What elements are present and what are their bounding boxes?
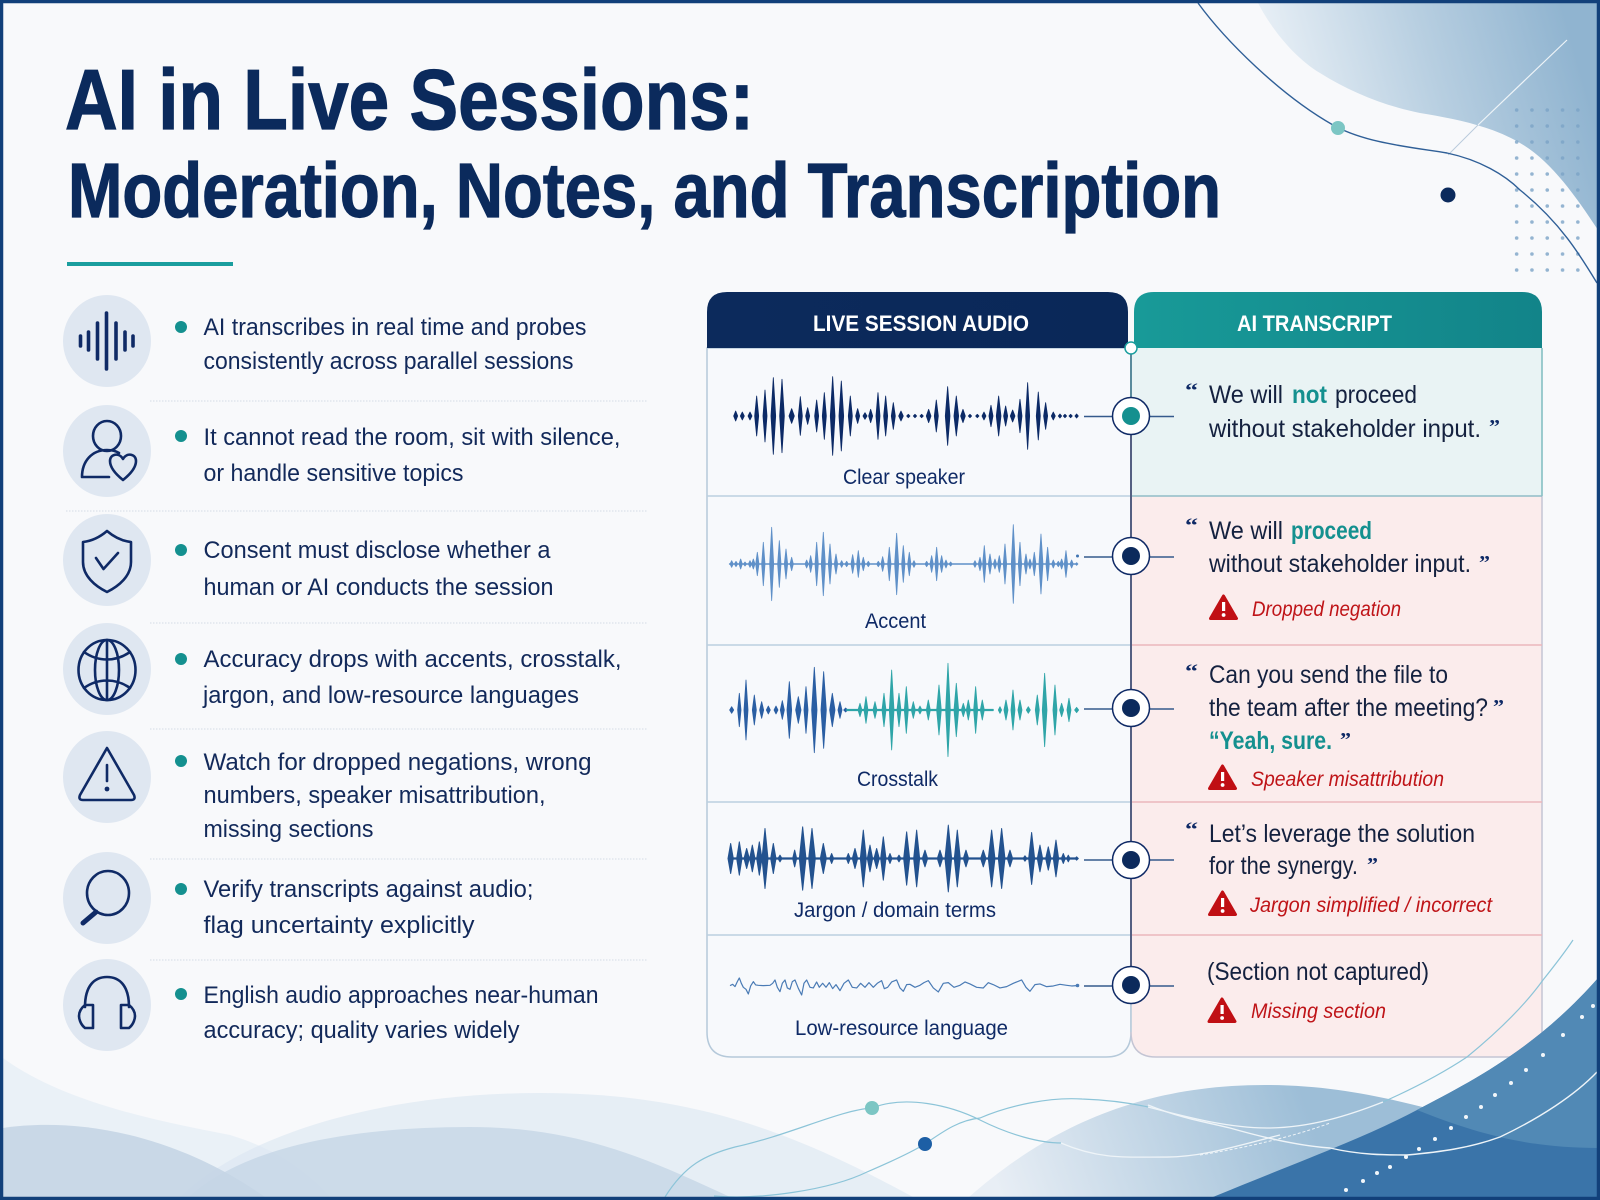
transcript: jargon: Let’s leverage the solution [1209, 820, 1475, 848]
transcript: accent: proceed [1291, 517, 1372, 545]
label: accent: Accent [865, 610, 926, 633]
panel: AI transcript [1131, 292, 1542, 1057]
point 2: It cannot read the room, sit with silence, [204, 424, 620, 451]
transcript: accent: Dropped negation [1252, 597, 1401, 621]
point 6: flag uncertainty explicitly [204, 912, 474, 939]
point 1: AI transcribes in real time and probes [204, 314, 586, 341]
transcript: crosstalk: Can you send the file to [1209, 661, 1448, 689]
transcript: clear speaker: “ [1185, 380, 1198, 402]
header: AI transcript: AI TRANSCRIPT [1237, 311, 1393, 336]
icon: warning [1210, 596, 1236, 618]
transcript: low-resource language [1207, 958, 1429, 1023]
point 7 [63, 959, 598, 1051]
transcript: clear speaker: not [1292, 381, 1328, 409]
title accent rule [67, 262, 233, 266]
point 7: English audio approaches near-human [204, 982, 598, 1009]
transcript: jargon [1185, 819, 1493, 917]
point 5 [63, 731, 592, 843]
waveform: jargon [728, 825, 1078, 892]
node: clear speaker [1112, 398, 1150, 434]
transcript: crosstalk: ” [1493, 696, 1504, 718]
transcript: accent: ” [1479, 552, 1490, 574]
label: low-resource language: Low-resource language [795, 1017, 1008, 1040]
point 5: Watch for dropped negations, wrong [204, 749, 592, 776]
transcript: clear speaker: proceed [1335, 381, 1417, 409]
point 2: or handle sensitive topics [204, 460, 464, 487]
point 2 [63, 405, 620, 497]
point 5: missing sections [204, 816, 374, 843]
transcript: clear speaker [1185, 380, 1500, 443]
decoration: top right shape [1198, 3, 1598, 283]
transcript: crosstalk: the team after the meeting? [1209, 694, 1488, 722]
node: accent [1112, 538, 1150, 574]
transcript: jargon: ” [1367, 854, 1378, 876]
point 4: Accuracy drops with accents, crosstalk, [204, 646, 622, 673]
transcript: crosstalk: ” [1340, 729, 1351, 751]
icon: warning [1210, 892, 1236, 914]
waveform: low-resource language [730, 978, 1079, 995]
transcript: jargon: for the synergy. [1209, 852, 1358, 880]
transcript: accent: without stakeholder input. [1208, 550, 1471, 578]
label: jargon / domain terms: Jargon / domain terms [794, 899, 996, 922]
node: crosstalk [1112, 690, 1150, 726]
title: AI in Live Sessions: [65, 53, 754, 148]
point 4: jargon, and low-resource languages [202, 682, 579, 709]
transcript: crosstalk: “Yeah, sure. [1209, 727, 1332, 755]
header: live session audio: LIVE SESSION AUDIO [813, 311, 1029, 336]
transcript: accent: We will [1209, 517, 1283, 545]
timeline connector [1084, 342, 1174, 1032]
waveform: crosstalk [730, 663, 1079, 757]
point 6 [63, 852, 534, 944]
header: AI transcript [1134, 292, 1542, 348]
transcript: clear speaker: ” [1489, 416, 1500, 438]
point 6: Verify transcripts against audio; [204, 876, 534, 903]
decoration: bottom hills [3, 1058, 1600, 1197]
transcript: low-resource language: (Section not captured) [1207, 958, 1429, 986]
label: crosstalk: Crosstalk [857, 768, 938, 791]
transcript: accent [1185, 515, 1490, 621]
transcript: jargon: Jargon simplified / incorrect [1249, 893, 1493, 917]
point 3 [63, 514, 554, 606]
transcript: crosstalk: Speaker misattribution [1251, 767, 1444, 791]
transcript: low-resource language: Missing section [1251, 999, 1386, 1023]
icon: warning [1210, 766, 1236, 788]
transcript: clear speaker: We will [1209, 381, 1283, 409]
point 3: Consent must disclose whether a [204, 537, 551, 564]
transcript: accent: “ [1185, 515, 1198, 537]
icon: warning [1209, 999, 1235, 1022]
point 4 [63, 623, 622, 715]
point 3: human or AI conducts the session [204, 574, 554, 601]
title: Moderation, Notes, and Transcription [68, 148, 1221, 234]
header: live session audio [707, 292, 1128, 348]
point 1: consistently across parallel sessions [204, 348, 574, 375]
point 7: accuracy; quality varies widely [204, 1017, 520, 1044]
point 1 [63, 295, 586, 387]
node: jargon [1112, 842, 1150, 878]
waveform: clear speaker [734, 377, 1078, 455]
panel: key points list [63, 295, 648, 1051]
transcript: jargon: “ [1185, 819, 1198, 841]
panel: live session audio [707, 292, 1131, 1057]
title [65, 53, 1221, 234]
waveform: accent [729, 525, 1079, 603]
transcript: crosstalk [1185, 661, 1504, 791]
point 5: numbers, speaker misattribution, [204, 782, 546, 809]
transcript: crosstalk: “ [1185, 661, 1198, 683]
node: low-resource [1112, 966, 1150, 1004]
decoration: bottom right wave and curves [665, 940, 1599, 1197]
label: clear speaker: Clear speaker [843, 466, 965, 489]
transcript: clear speaker: without stakeholder input. [1208, 415, 1481, 443]
